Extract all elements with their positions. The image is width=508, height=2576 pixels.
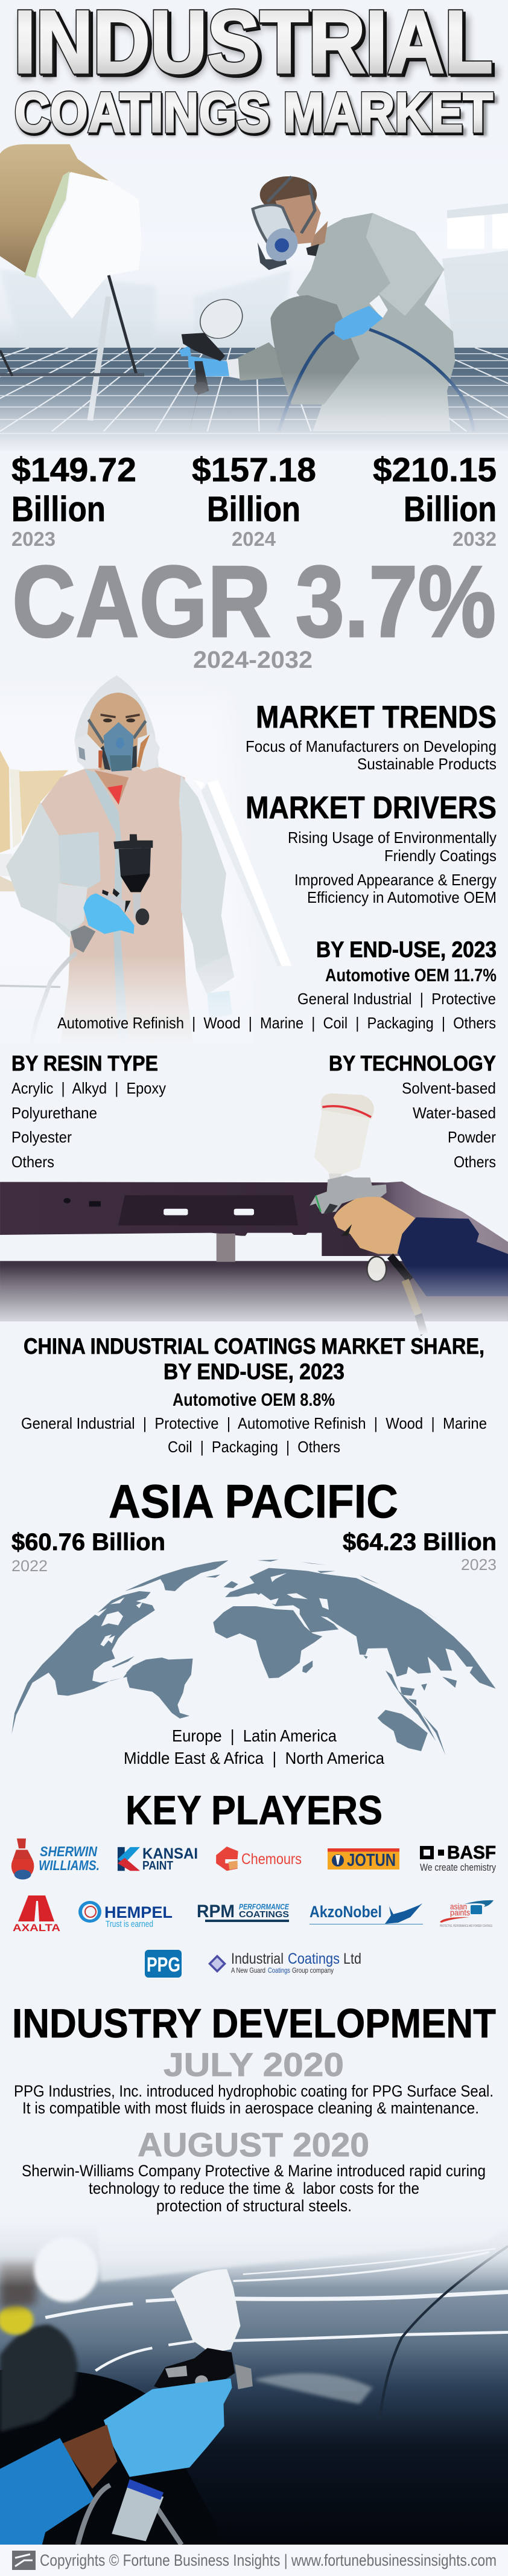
footer [0, 2545, 508, 2576]
logo: basf [420, 1842, 496, 1873]
right sleeve [179, 775, 233, 995]
zipper strip [84, 769, 129, 1043]
logo: sherwin-williams: WILLIAMS. [39, 1857, 100, 1873]
stat 2032 [373, 450, 497, 550]
logo: hempel: HEMPEL [104, 1903, 173, 1921]
bumper recess and support [63, 1195, 298, 1262]
cup red band [322, 1106, 371, 1117]
logo: axalta [13, 1895, 60, 1934]
logo: industrial coatings ltd: Group company [292, 1966, 334, 1975]
logo: jotun [328, 1848, 399, 1870]
segments: Water-based [413, 1104, 496, 1122]
logo: chemours [216, 1847, 302, 1871]
highlight: Automotive OEM 8.8% [173, 1390, 335, 1410]
blue sleeve [0, 2438, 95, 2545]
driver text: Efficiency in Automotive OEM [307, 888, 497, 906]
brass fitting [405, 1280, 418, 1315]
chest pocket [59, 831, 101, 888]
hero photo: painter spraying a panel [0, 135, 508, 453]
painter [179, 176, 474, 431]
north america [11, 1591, 155, 1734]
market size stats [11, 450, 497, 550]
car body [0, 2217, 508, 2545]
top fade [0, 2217, 508, 2287]
logo: industrial coatings ltd [208, 1950, 361, 1975]
driver text: Friendly Coatings [384, 847, 497, 865]
spray gun, hand and sleeve [0, 1094, 508, 1335]
segments: Coil | Packaging | Others [168, 1438, 340, 1456]
paint cup body [314, 1110, 370, 1174]
other regions [124, 1726, 384, 1767]
market drivers [246, 790, 497, 906]
segments: General Industrial | Protective [297, 990, 496, 1008]
backdrop [0, 699, 291, 1009]
logo: asian paints ppg: paints [450, 1908, 470, 1917]
stat 2023: 2023 [11, 528, 56, 550]
seas and lakes [94, 1573, 329, 1647]
trend text [246, 737, 497, 773]
photo: worker in respirator holding spray gun [0, 675, 291, 1044]
logo: industrial coatings ltd: Coatings [288, 1950, 340, 1967]
trend text: Sustainable Products [357, 755, 497, 773]
stat 2032: 2032 [452, 528, 497, 550]
south america [126, 1658, 193, 1719]
logo: hempel [78, 1901, 173, 1929]
logo: ppg: PPG [147, 1953, 180, 1976]
asia pacific 2023 value [343, 1529, 497, 1574]
photo: spray gun over car bumper [0, 1094, 508, 1335]
logo: chemours: Chemours [241, 1851, 302, 1868]
logo: kansai paint [118, 1845, 198, 1873]
black spray gun [154, 2348, 253, 2394]
august 2020 date: AUGUST 2020 [138, 2126, 369, 2164]
spray gun [102, 888, 149, 925]
masking paper [0, 144, 109, 278]
segments [402, 1079, 496, 1171]
segments: Acrylic | Alkyd | Epoxy [11, 1079, 166, 1097]
logo: ppg [145, 1950, 182, 1978]
segments: Polyester [11, 1128, 72, 1146]
booth wall and window [0, 135, 508, 383]
logo: basf: BASF [447, 1842, 496, 1863]
heading [24, 1334, 484, 1384]
august 2020 text: protection of structural steels. [156, 2197, 352, 2215]
logo icon [12, 2551, 36, 2570]
driver text: Rising Usage of Environmentally [288, 828, 497, 847]
segments: Polyurethane [11, 1104, 97, 1122]
trend text: Focus of Manufacturers on Developing [246, 737, 497, 755]
july 2020 text [14, 2082, 494, 2117]
august 2020 text [22, 2162, 486, 2215]
stat 2023 [11, 450, 136, 550]
wrist [62, 2424, 117, 2488]
photo: gloved hand spraying dark car [0, 2217, 508, 2545]
asia pacific 2022 value [11, 1529, 165, 1575]
black paint cup [113, 835, 153, 892]
stat 2024: $157.18 [192, 450, 316, 489]
navy sleeve [397, 1217, 508, 1296]
asia pacific 2022 value: $60.76 Billion [11, 1529, 165, 1556]
faded glove [207, 991, 232, 1019]
key players heading: KEY PLAYERS [125, 1787, 383, 1833]
logo: sherwin-williams [11, 1839, 100, 1879]
asia pacific 2022 value: 2022 [11, 1557, 48, 1575]
paint cup lid [321, 1094, 374, 1119]
panel stand [0, 275, 144, 420]
segments: Others [11, 1153, 54, 1171]
bumper body and lower strip [0, 1182, 508, 1321]
segments [21, 1414, 487, 1456]
segments: Solvent-based [402, 1079, 496, 1097]
white paint cup [171, 2269, 240, 2353]
indonesia and islands [364, 1656, 457, 1741]
asia pacific 2023 value: 2023 [461, 1556, 497, 1574]
window reflection [97, 2226, 508, 2281]
logo: rpm performance coatings: PERFORMANCE [239, 1902, 289, 1911]
air hose and brass fitting [390, 1256, 424, 1334]
logo: kansai paint: KANSAI [142, 1845, 198, 1862]
caribbean islands [112, 1656, 135, 1668]
grated floor [0, 348, 508, 452]
masking tape [24, 171, 69, 278]
left cuff [56, 883, 87, 931]
asia pacific 2023 value: $64.23 Billion [343, 1529, 497, 1556]
august 2020 text: technology to reduce the time & labor costs for the [89, 2179, 419, 2197]
new guinea sliver [423, 1715, 445, 1755]
gun trigger [341, 1224, 352, 1236]
other regions: Middle East & Africa | North America [124, 1749, 384, 1767]
australia [378, 1710, 428, 1751]
logo: asian paints ppg [440, 1900, 494, 1928]
blue glove [104, 2379, 232, 2477]
eurasia [225, 1568, 496, 1689]
by technology [329, 1052, 496, 1171]
hood [74, 675, 159, 769]
hand [334, 1197, 415, 1254]
hose fitting and hose [31, 925, 95, 1043]
other regions: Europe | Latin America [172, 1726, 337, 1745]
heading: BY END-USE, 2023 [164, 1359, 344, 1384]
uk and arctic slivers [224, 1560, 439, 1621]
logo: kansai paint: PAINT [142, 1859, 173, 1873]
logo: industrial coatings ltd: A New Guard [231, 1966, 265, 1975]
stat 2024 [192, 450, 316, 550]
face [86, 693, 148, 770]
logo: industrial coatings ltd: Coatings [268, 1966, 290, 1975]
right cuff [196, 953, 234, 995]
logo: industrial coatings ltd: Ltd [343, 1950, 361, 1967]
market trends [246, 700, 497, 773]
CAGR period: 2024-2032 [193, 647, 313, 673]
air filter [78, 2479, 182, 2545]
madagascar [302, 1661, 313, 1673]
segments [11, 1079, 166, 1171]
neck and red shirt [95, 770, 129, 805]
stat 2023: $149.72 [11, 450, 136, 489]
greenland [125, 1560, 229, 1591]
logo: sherwin-williams: SHERWIN [40, 1844, 97, 1859]
paint spray [256, 2373, 373, 2404]
left sleeve [6, 802, 86, 938]
door shut line [379, 2246, 508, 2420]
iceland [206, 1574, 220, 1578]
reflection stripes [45, 2249, 508, 2371]
chrome gun [310, 1173, 387, 1214]
segments: Others [454, 1153, 496, 1171]
segments: Powder [448, 1128, 496, 1146]
segments [57, 990, 496, 1032]
pressure gauge [367, 1257, 386, 1281]
white car panel [38, 172, 142, 319]
logo: akzonobel: AkzoNobel [310, 1903, 382, 1921]
asia pacific heading: ASIA PACIFIC [109, 1475, 398, 1528]
fade to background [0, 955, 253, 1044]
stat 2023: Billion [11, 490, 106, 529]
world map globe [11, 1560, 496, 1755]
logo: rpm performance coatings: COATINGS [239, 1909, 289, 1920]
china market share [21, 1334, 487, 1456]
respirator [74, 720, 160, 771]
africa [213, 1606, 322, 1678]
logo: akzonobel [310, 1903, 423, 1924]
stat 2024: 2024 [232, 528, 276, 550]
title [14, 0, 500, 147]
logo: industrial coatings ltd: Industrial [231, 1950, 284, 1967]
blue glove [83, 893, 135, 934]
suit body [40, 765, 193, 1043]
heading: BY TECHNOLOGY [329, 1052, 496, 1075]
lower fade [0, 1266, 508, 1335]
footer bar [0, 2545, 508, 2576]
stat 2032: Billion [404, 490, 497, 529]
blurred wheel arch and mask [0, 2237, 227, 2545]
logo: rpm performance coatings [197, 1902, 289, 1922]
logo: hempel: Trust is earned [106, 1919, 153, 1929]
logo: rpm performance coatings: RPM [197, 1902, 235, 1921]
stat 2032: $210.15 [373, 450, 497, 489]
heading: BY RESIN TYPE [11, 1052, 158, 1075]
logo: jotun: JOTUN [347, 1851, 396, 1870]
logo: asian paints ppg: asian [450, 1902, 467, 1911]
key players logos [11, 1839, 496, 1978]
driver text [288, 828, 497, 906]
july 2020 date: JULY 2020 [164, 2046, 344, 2083]
logo: axalta: AXALTA [13, 1922, 60, 1934]
stat 2024: Billion [207, 490, 300, 529]
bottom fade of hero [0, 372, 508, 453]
by end-use [57, 937, 497, 1032]
by resin type [11, 1052, 166, 1171]
